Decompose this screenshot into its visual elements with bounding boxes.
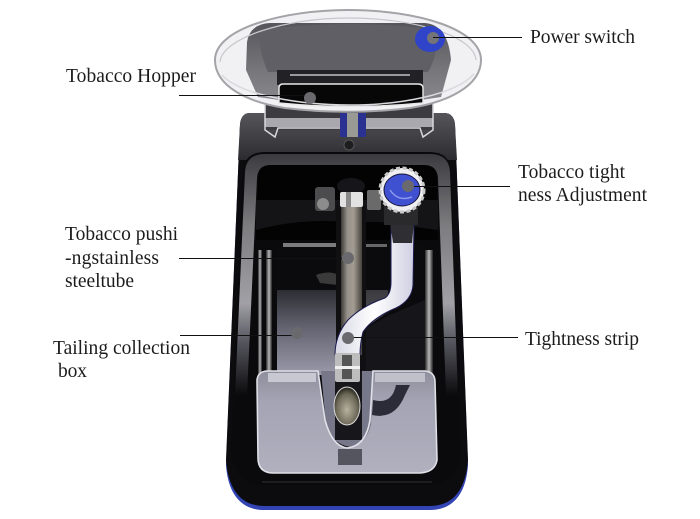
clear tailing collection tray [257, 371, 437, 482]
tightness adjustment dial [380, 168, 424, 225]
label: Tailing collection box: Tailing collection [53, 338, 190, 359]
label: Tobacco Hopper [66, 66, 316, 104]
label: Tobacco tightness Adjustment: ness Adjustment [518, 185, 648, 206]
label: Tobacco pushing stainless steel tube [65, 224, 354, 292]
tightness strip [334, 222, 414, 425]
label: Tobacco tightness Adjustment: Tobacco tight [518, 162, 626, 183]
label: Tightness strip: Tightness strip [525, 329, 639, 350]
label: Tobacco pushing stainless steel tube: -ngstainless [65, 248, 159, 269]
power switch button [415, 26, 445, 52]
label: Tobacco tightness Adjustment [402, 162, 648, 206]
stainless steel tube [315, 178, 381, 370]
label: Tailing collection box [53, 327, 303, 382]
collection box floor [258, 243, 433, 385]
inner well [231, 152, 461, 485]
label: Tightness strip [342, 329, 639, 350]
label: Tobacco pushing stainless steel tube: steeltube [65, 271, 134, 292]
label: Tobacco Hopper: Tobacco Hopper [66, 66, 196, 87]
label: Tobacco pushing stainless steel tube: Tobacco pushi [65, 224, 179, 245]
label: Tailing collection box: box [58, 361, 87, 382]
transparent tobacco hopper [215, 10, 481, 150]
machine body [226, 113, 468, 510]
label: Power switch: Power switch [530, 27, 635, 48]
